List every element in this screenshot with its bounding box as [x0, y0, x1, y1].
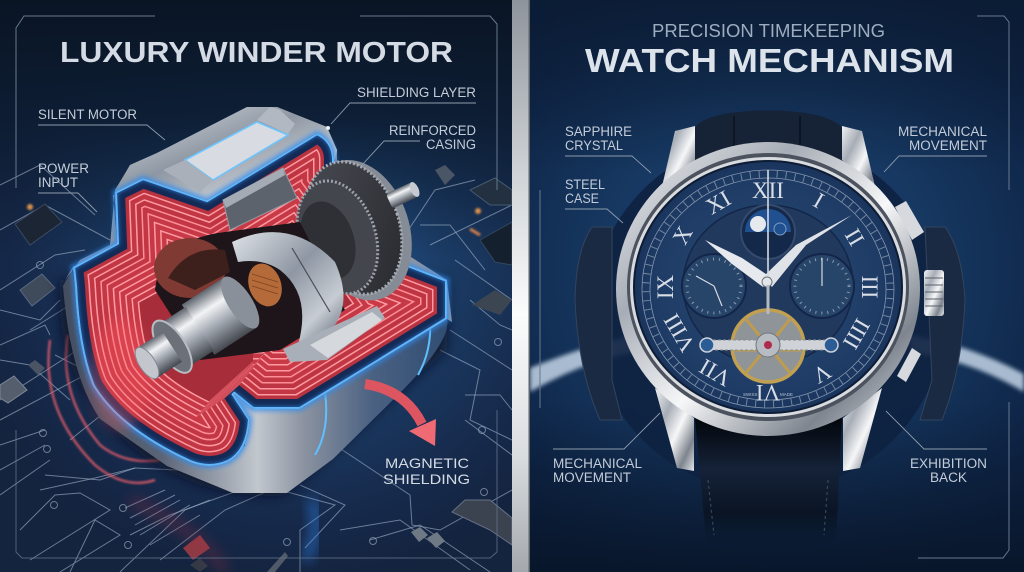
subdial: moon phase [741, 205, 795, 259]
label: exhibition back: EXHIBITION [910, 456, 987, 471]
label: silent motor: SILENT MOTOR [38, 107, 137, 122]
copper winding [242, 259, 288, 311]
lower motor housing [63, 270, 447, 493]
label: sapphire crystal [565, 124, 651, 173]
label: steel case: CASE [565, 191, 599, 206]
title: precision timekeeping: PRECISION TIMEKEEPING [652, 21, 885, 41]
label: reinforced casing: CASING [426, 137, 476, 152]
label: power input: INPUT [38, 175, 78, 190]
dark inner cavity [155, 222, 345, 360]
label: mechanical movement lower: MECHANICAL [553, 456, 642, 471]
label: power input [38, 161, 97, 212]
main shaft [124, 271, 266, 393]
roman numerals: XII [752, 178, 784, 203]
label: exhibition back [886, 411, 987, 485]
panel frame right [540, 16, 1009, 558]
roman numerals: VI [756, 380, 780, 405]
label: magnetic shielding: MAGNETIC [385, 455, 469, 471]
roman numerals: II [840, 224, 869, 250]
gear assembly [279, 146, 429, 318]
icon: motor cutaway [60, 107, 460, 496]
subdial: left [682, 254, 746, 318]
icon: wristwatch [616, 110, 944, 545]
label: shielding layer: SHIELDING LAYER [357, 85, 476, 100]
panel frame left [16, 16, 497, 558]
roman numerals [653, 178, 882, 405]
red glow over coils [90, 320, 150, 430]
lugs [660, 126, 695, 195]
label: magnetic shielding: SHIELDING [383, 471, 470, 487]
hands [705, 170, 852, 314]
output shaft [386, 181, 422, 209]
label: mechanical movement lower: MOVEMENT [553, 470, 631, 485]
swiss made: MADE [780, 392, 793, 397]
bottom strap [695, 418, 842, 545]
label: steel case: STEEL [565, 177, 605, 192]
label: power input: POWER [38, 161, 89, 176]
roman numerals: XI [701, 186, 735, 219]
label: exhibition back: BACK [930, 470, 967, 485]
roman numerals: VIII [659, 309, 700, 356]
chips [0, 165, 512, 572]
pushers and crown [895, 201, 924, 240]
label: reinforced casing [362, 123, 476, 165]
label: mechanical movement lower [553, 413, 660, 485]
case [616, 142, 920, 436]
lower clamp block [283, 306, 385, 362]
label: silent motor [38, 107, 165, 140]
roman numerals: IX [653, 274, 678, 299]
label: mechanical movement upper [884, 124, 987, 172]
roman numerals: V [808, 359, 835, 389]
dial [634, 161, 902, 413]
stator ring [232, 232, 344, 345]
title: luxury winder motor: LUXURY WINDER MOTOR [60, 37, 453, 69]
label: mechanical movement upper: MOVEMENT [909, 138, 987, 153]
cut face with coil lines [73, 133, 447, 466]
label: magnetic shielding [383, 455, 470, 487]
swiss made [743, 392, 793, 397]
top clamp block [223, 168, 297, 230]
roman numerals: VII [695, 354, 735, 391]
roman numerals: III [857, 276, 882, 298]
subdial: right [790, 254, 854, 318]
arrow: magnetic shielding [365, 384, 436, 446]
roman numerals: IIII [838, 314, 875, 353]
upper housing rim [65, 107, 452, 322]
circuit board traces [0, 165, 512, 572]
swiss made: SWISS [743, 392, 758, 397]
label: shielding layer [326, 85, 476, 130]
label: sapphire crystal: SAPPHIRE [565, 124, 632, 139]
label: steel case [565, 177, 623, 223]
roman numerals: I [809, 188, 828, 213]
panel: right background [530, 0, 1024, 572]
roman numerals: X [668, 221, 698, 249]
open balance wheel [700, 310, 838, 382]
label: sapphire crystal: CRYSTAL [565, 138, 623, 153]
red magnetic field arcs [48, 335, 160, 483]
label: mechanical movement upper: MECHANICAL [898, 124, 987, 139]
divider: silver bar [512, 0, 530, 572]
panel: left background [0, 0, 512, 572]
watch winder cradle [575, 138, 965, 492]
title: watch mechanism: WATCH MECHANISM [585, 42, 954, 79]
label: reinforced casing: REINFORCED [389, 123, 476, 138]
top strap [695, 110, 842, 160]
